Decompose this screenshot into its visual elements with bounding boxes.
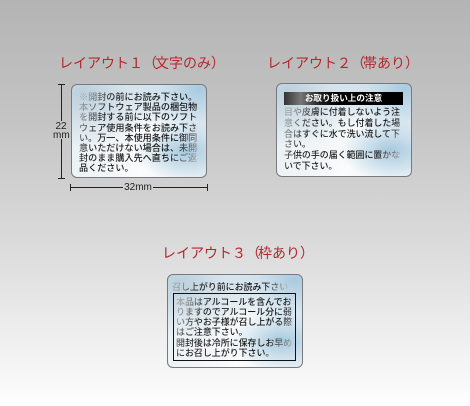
panel: layout 2 label xyxy=(276,83,412,177)
text block: label copy: 意ください。もし付着した場 xyxy=(284,116,400,129)
text block: label copy xyxy=(284,107,400,172)
text block: label copy: りますのでアルコール分に弱 xyxy=(176,305,292,318)
dimension label: 22mm: mm xyxy=(53,130,70,141)
text block: label copy: 品ください。 xyxy=(79,160,134,174)
text block: label copy: 本ソフトウェア製品の梱包物 xyxy=(79,99,197,113)
band: heading: お取り扱い上の注意 xyxy=(305,92,382,104)
dimension label: 32mm: 32mm xyxy=(124,182,152,193)
heading: layout 3: レイアウト３（枠あり） xyxy=(162,243,314,263)
text block: label copy: 目や皮膚に付着しないよう注 xyxy=(284,105,400,118)
frame: bordered copy xyxy=(173,293,296,361)
text block: label copy: 開封後は冷所に保存しお早め xyxy=(176,336,292,349)
text block: label copy: を開封する前に以下のソフト xyxy=(79,109,197,123)
heading: layout 1: レイアウト１（文字のみ） xyxy=(59,53,225,73)
text block: label copy: い。万一、本使用条件に御同 xyxy=(79,130,197,144)
text block: label copy: はご注意下さい。 xyxy=(176,325,248,338)
text block: label copy: 子供の手の届く範囲に置かな xyxy=(284,148,400,161)
panel: layout 1 label xyxy=(71,84,207,178)
text: label title: 召し上がり前にお読み下さい xyxy=(172,280,288,293)
text block: label copy: 本品はアルコールを含んでお xyxy=(176,295,291,308)
text block: label copy: さい。 xyxy=(284,137,311,150)
text block: label copy: にお召し上がり下さい。 xyxy=(176,346,274,359)
text block: label copy: ※開封の前にお読み下さい。 xyxy=(79,89,197,103)
panel: layout 3 label xyxy=(167,274,303,368)
text block: label copy xyxy=(79,91,197,173)
text block: label copy: いで下さい。 xyxy=(284,159,337,172)
text block: label copy: 合はすぐに水で洗い流して下 xyxy=(284,127,400,140)
text block: label copy: 封のまま購入先へ直ちにご返 xyxy=(79,150,197,164)
text block: label copy: 意いただけない場合は、未開 xyxy=(79,140,197,154)
text block: label copy xyxy=(176,297,292,358)
text block: label copy: ウェア使用条件をお読み下さ xyxy=(79,120,197,134)
dimension: height 22mm xyxy=(53,84,70,179)
band: heading xyxy=(284,92,403,105)
dimension label: 22mm xyxy=(53,121,70,141)
text block: label copy: い方やお子様が召し上がる際 xyxy=(176,315,292,328)
dimension label: 22mm: 22 xyxy=(55,121,67,132)
heading: layout 2: レイアウト２（帯あり） xyxy=(267,53,419,73)
